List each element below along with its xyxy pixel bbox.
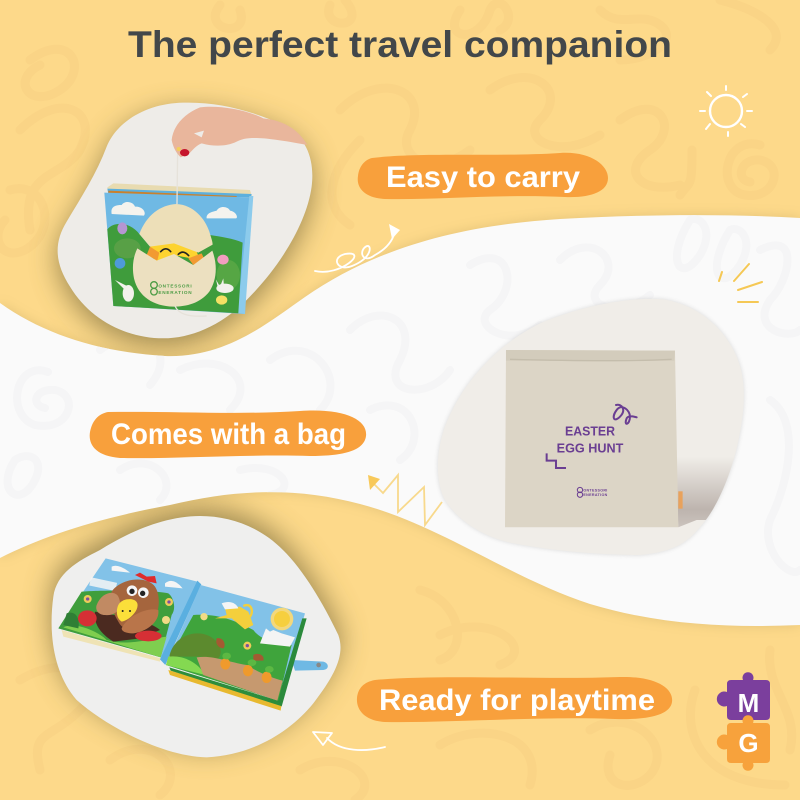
right page: sky [166, 585, 305, 701]
egg bottom [133, 248, 216, 307]
right page: watering can [215, 602, 253, 629]
clouds [111, 202, 237, 218]
right page edge [168, 670, 282, 711]
carrots [200, 613, 274, 683]
bag squiggle [614, 405, 637, 424]
hen [96, 573, 159, 633]
arrow: zigzag toward bag label [368, 475, 442, 525]
pill: easy to carry [358, 153, 608, 199]
pill: easy to carry: Easy to carry [386, 161, 580, 194]
bottom photo shadow on yellow [52, 508, 341, 749]
painted eggs [115, 222, 229, 305]
book page edges [107, 183, 252, 198]
book logo [151, 282, 192, 295]
right page: garden [166, 615, 292, 701]
rabbits [115, 278, 234, 302]
puzzle piece G: G [738, 728, 759, 758]
strings [175, 150, 207, 316]
pill: ready for playtime: Ready for playtime [379, 684, 655, 717]
book front cover [104, 193, 253, 314]
panel: photo of bag [438, 299, 750, 555]
bag zigzag [547, 453, 566, 468]
icon: spark lines [719, 264, 762, 302]
bag text: EASTER [565, 425, 615, 439]
arrow: curly arrow toward easy to carry [315, 224, 400, 272]
left page: sky [58, 558, 197, 657]
left page: fence and clouds [89, 566, 183, 591]
pill: comes with a bag: Comes with a bag [111, 418, 346, 451]
panel: photo of book with pull string [58, 103, 312, 338]
white wave band shadow [0, 215, 800, 626]
bag text: EGG HUNT [557, 441, 624, 455]
right page: sun [271, 608, 293, 630]
white wave band [0, 215, 800, 626]
chick [147, 243, 204, 265]
arrow: curved arrow toward open book [313, 732, 385, 750]
book logo: ONTESSORI [158, 283, 192, 288]
hand [172, 107, 307, 157]
puzzle piece M: M [738, 688, 759, 718]
logo: MG puzzle pieces [717, 672, 770, 771]
clasp [292, 660, 328, 671]
bag text [557, 425, 624, 455]
panel: photo of open book [52, 516, 341, 757]
bag logo: ENERATION [583, 493, 608, 497]
title: The perfect travel companion [128, 24, 672, 65]
bag shadow [677, 464, 732, 527]
left page: dirt and tomatoes [95, 612, 160, 642]
book spine [160, 581, 201, 665]
egg top [139, 204, 213, 253]
bag logo: ONTESSORI [583, 488, 607, 492]
canvas bag [505, 350, 678, 527]
top photo shadow on yellow [58, 111, 312, 346]
icon: sun [700, 86, 752, 136]
blob shadow: bag photo [438, 299, 744, 555]
bag logo [577, 487, 608, 497]
left page edge [62, 630, 161, 662]
pill: comes with a bag [90, 411, 366, 458]
left page: grass [58, 591, 174, 657]
bag tag [678, 491, 683, 509]
pill: ready for playtime [357, 677, 672, 722]
book logo: ENERATION [158, 290, 192, 295]
right page: fence [260, 628, 295, 647]
left page: flowers [84, 595, 173, 624]
